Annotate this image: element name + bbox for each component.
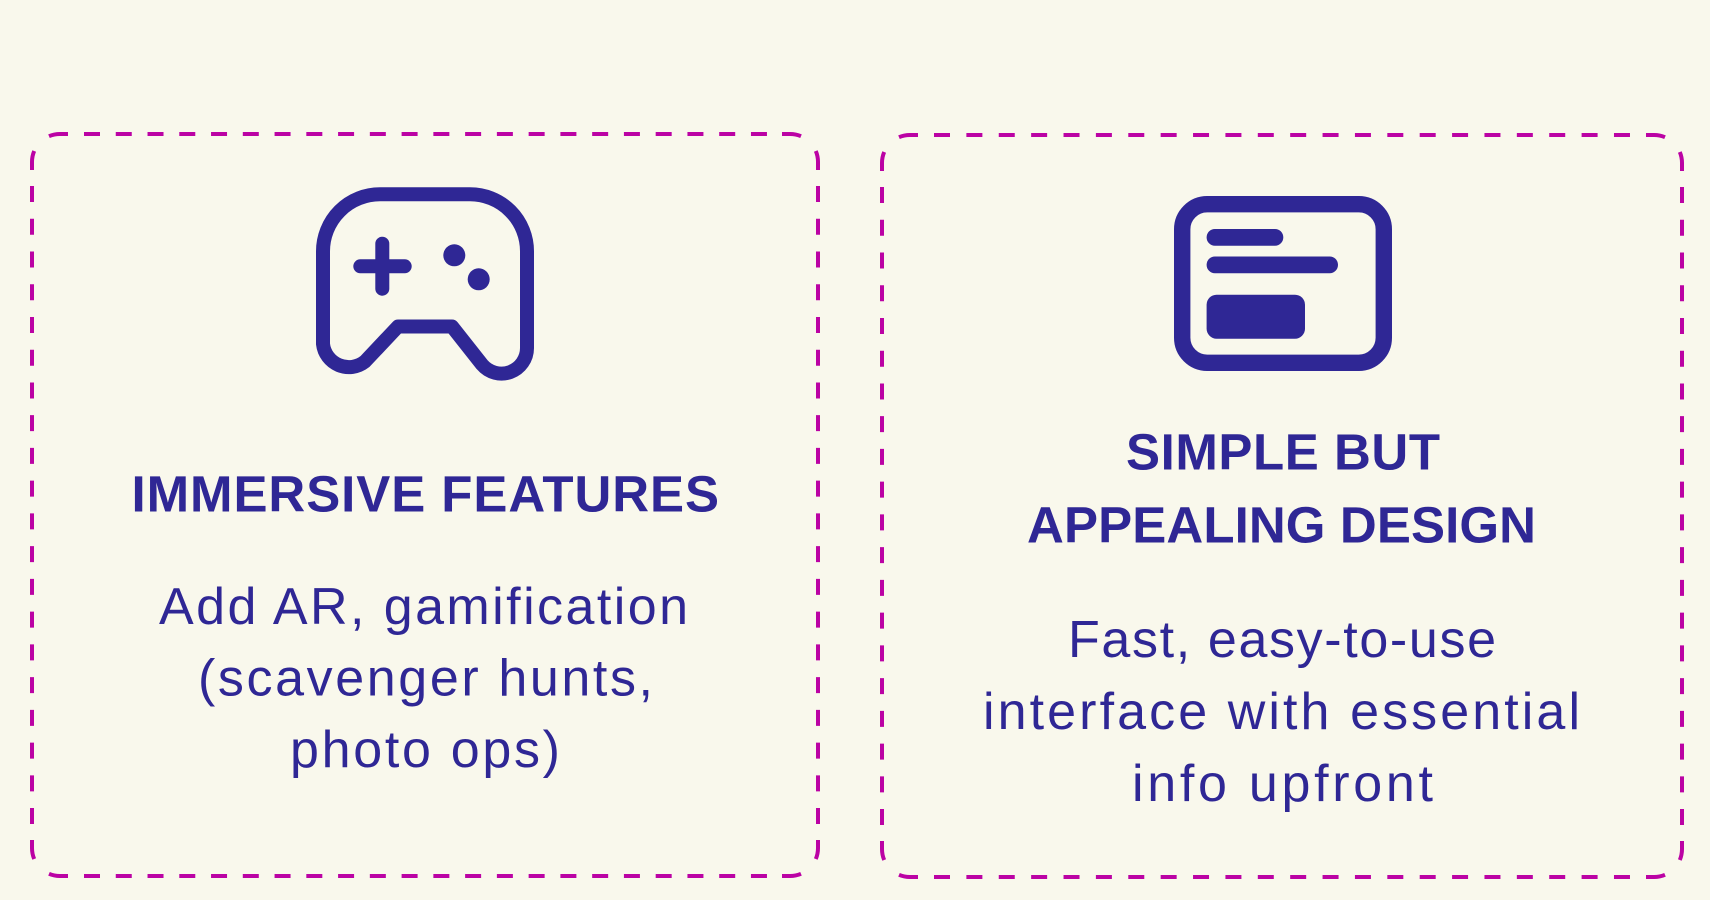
text block: immersive features description: photo ops): [290, 721, 560, 779]
icon: app window layout: [1182, 204, 1384, 363]
heading: simple but appealing design: SIMPLE BUT: [1126, 424, 1440, 480]
text block: simple but appealing design description: Fast, easy-to-use: [1068, 611, 1496, 669]
text block: immersive features description: Add AR, gamification: [159, 578, 688, 636]
text block: immersive features description: [159, 578, 688, 779]
heading: simple but appealing design: [1027, 424, 1536, 554]
icon: game controller: [323, 194, 527, 374]
heading: immersive features: IMMERSIVE FEATURES: [132, 466, 719, 522]
text block: simple but appealing design description: interface with essential: [983, 683, 1580, 741]
text block: simple but appealing design description: info upfront: [1132, 755, 1434, 813]
dashed card border: simple but appealing design: [882, 135, 1682, 877]
heading: simple but appealing design: APPEALING DESIGN: [1027, 496, 1536, 554]
panel: immersive features: [32, 134, 818, 876]
panel: simple but appealing design: [882, 135, 1682, 877]
text block: simple but appealing design description: [983, 611, 1580, 813]
dashed card border: immersive features: [32, 134, 818, 876]
text block: immersive features description: (scavenger hunts,: [198, 650, 653, 708]
